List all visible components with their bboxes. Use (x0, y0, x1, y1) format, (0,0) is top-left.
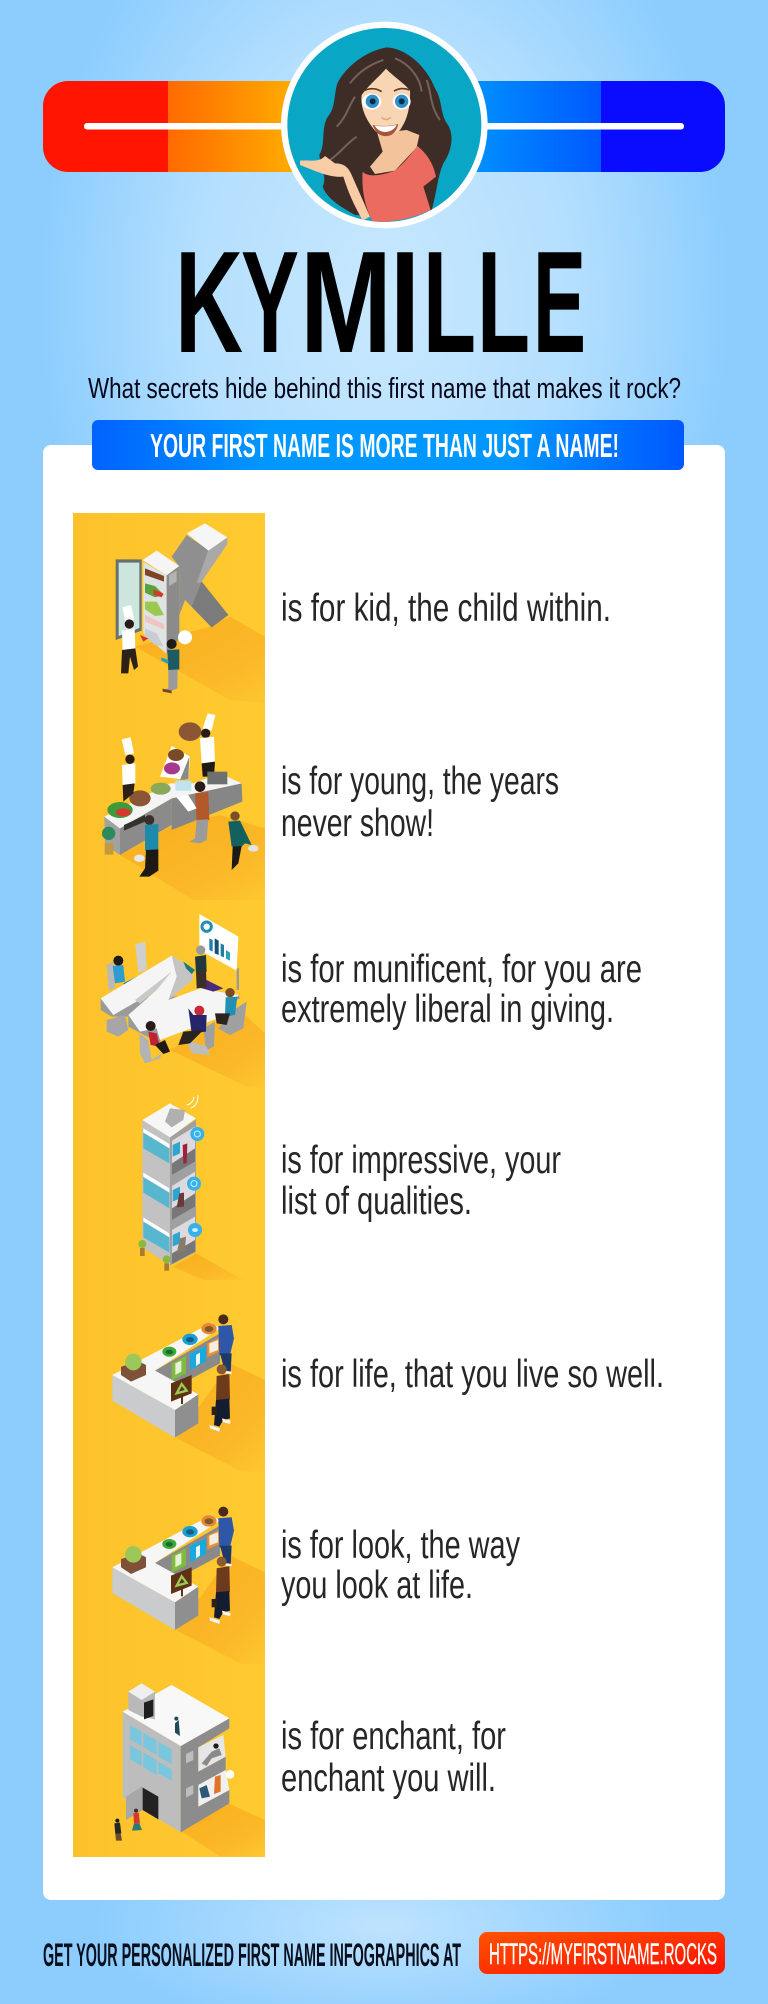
text: i (281, 1139, 561, 1223)
white content panel (43, 445, 725, 1900)
header gradient bar (43, 81, 725, 172)
yellow illustration strip (73, 513, 265, 1857)
hair (319, 47, 451, 217)
text: l second: you look at life. (281, 1564, 473, 1607)
text: m: is for munificent, for you are (281, 948, 642, 991)
title: E (533, 221, 586, 383)
title: I (390, 221, 420, 383)
text: m: extremely liberal in giving. (281, 988, 614, 1031)
text: l second: is for look, the way (281, 1524, 520, 1567)
title: L (423, 221, 476, 383)
arm and hand (300, 156, 370, 221)
text: i: is for impressive, your (281, 1139, 561, 1182)
text: e: enchant you will. (281, 1757, 496, 1800)
banner (92, 420, 684, 470)
icon: letter M meeting table (101, 914, 265, 1088)
brows (363, 89, 409, 92)
eyes (362, 94, 381, 110)
neck and chest (370, 130, 419, 174)
footer url button (479, 1932, 725, 1974)
title: K (175, 221, 243, 383)
text: m (281, 948, 642, 1031)
text: y (281, 760, 559, 845)
face (361, 69, 410, 135)
nose and smile (373, 124, 398, 136)
text: e (281, 1715, 506, 1800)
icon: letter K with fridge (116, 523, 265, 703)
shirt (362, 146, 436, 222)
icon: letter L recycling counter (112, 1314, 265, 1472)
text: y: is for young, the years (281, 760, 559, 803)
avatar portrait (281, 22, 488, 228)
text: y: never show! (281, 802, 434, 845)
text: e: is for enchant, for (281, 1715, 506, 1758)
icon: letter I tower (138, 1095, 243, 1280)
text: l second (281, 1524, 520, 1607)
icon: letter L recycling counter second (112, 1507, 265, 1664)
title: L (477, 221, 530, 383)
text: i: list of qualities. (281, 1180, 472, 1223)
text: k: is for kid, the child within. (281, 587, 611, 630)
title: Y (241, 221, 299, 383)
icon: letter Y buffet (102, 713, 265, 900)
title: M (300, 221, 392, 383)
icon: letter E building (114, 1683, 265, 1857)
